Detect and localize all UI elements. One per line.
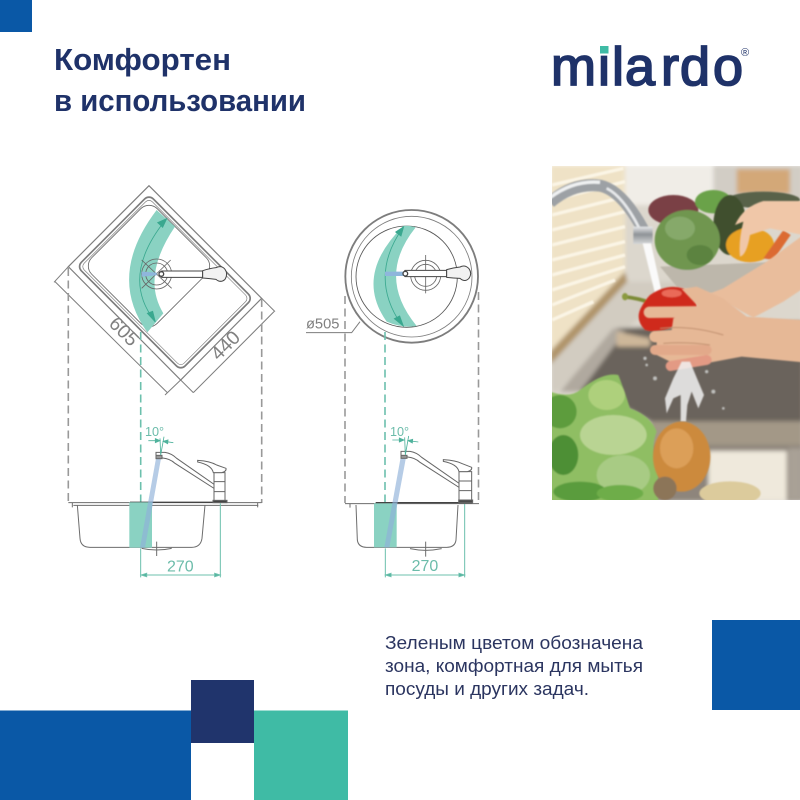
dashed guides: round sink	[345, 292, 478, 505]
description text: посуды и других задач.	[385, 679, 589, 699]
diagram: side view of rectangular sink	[68, 425, 262, 577]
countertop	[68, 503, 262, 507]
faucet side view	[156, 452, 227, 503]
faucet mount circles	[411, 255, 441, 293]
logo: milardo: milardo	[551, 37, 743, 97]
photo onion	[653, 422, 761, 505]
dimension 605: 605	[104, 313, 142, 351]
title: в использовании	[54, 83, 306, 118]
faucet mount circles	[142, 259, 172, 289]
photo water splash	[643, 357, 725, 422]
photo faucet	[550, 182, 653, 244]
dimension 270: 270	[412, 558, 438, 575]
water stream	[384, 457, 406, 547]
title: Комфортен	[54, 42, 231, 77]
dashed guides: rectangular sink	[68, 268, 262, 505]
description text	[385, 633, 644, 699]
bottom blue block	[0, 710, 191, 800]
photo background: kitchen	[550, 165, 800, 502]
comfort zone arc	[373, 226, 417, 327]
description text: зона, комфортная для мытья	[385, 656, 643, 676]
faucet side view	[401, 451, 473, 502]
diagram: side view of round sink	[345, 425, 479, 577]
dimension 505: ø505	[306, 317, 339, 333]
sink outer edge	[68, 186, 262, 380]
round sink rim	[351, 216, 472, 337]
dimension 605	[54, 267, 181, 395]
photo pepper	[622, 287, 697, 331]
angle 10 degrees	[390, 425, 418, 455]
photo upper hand and arm	[710, 201, 800, 318]
faucet top view	[159, 267, 227, 281]
right blue square	[712, 620, 800, 710]
sink bowl	[83, 200, 215, 332]
comfort zone arc	[129, 210, 175, 332]
countertop	[345, 504, 479, 508]
photo blind slats	[552, 168, 625, 320]
dimension 505	[306, 317, 360, 333]
photo lettuce	[543, 374, 658, 502]
dimension 270	[385, 504, 465, 577]
sink bowl side	[356, 505, 458, 557]
description text: Зеленым цветом обозначена	[385, 633, 644, 653]
logo: milardo: ®	[741, 47, 749, 59]
water stream	[140, 458, 161, 548]
faucet top view	[403, 266, 471, 280]
photo water stream	[643, 243, 662, 293]
round sink bowl	[356, 226, 457, 327]
sink rim	[77, 195, 253, 370]
diagram: top view of rectangular sink	[54, 186, 275, 395]
bottom teal block	[254, 710, 348, 800]
photo vegetables in bowl	[648, 190, 800, 295]
dimension 270	[141, 503, 220, 577]
angle 10 degrees	[145, 425, 173, 455]
photo washing hands	[649, 287, 800, 366]
comfort zone	[374, 503, 397, 547]
photo: washing a pepper under the faucet	[543, 165, 800, 505]
title	[54, 42, 306, 118]
swivel arrow arc	[140, 219, 167, 322]
angle 10 degrees: 10°	[390, 425, 409, 439]
dimension 440: 440	[207, 327, 245, 365]
diagram: top view of round sink	[306, 210, 478, 343]
angle 10 degrees: 10°	[145, 425, 164, 439]
comfort zone	[129, 502, 152, 548]
dimension 440	[181, 298, 275, 393]
water stream top view	[385, 272, 403, 276]
sink inner rim	[81, 198, 249, 366]
dimension 270: 270	[167, 559, 194, 576]
sink bowl side	[77, 505, 205, 556]
water stream top view	[142, 272, 157, 277]
swivel arrow arc	[385, 227, 404, 326]
bottom navy square	[191, 680, 254, 743]
round sink outer edge	[345, 210, 478, 343]
corner square	[0, 0, 32, 32]
